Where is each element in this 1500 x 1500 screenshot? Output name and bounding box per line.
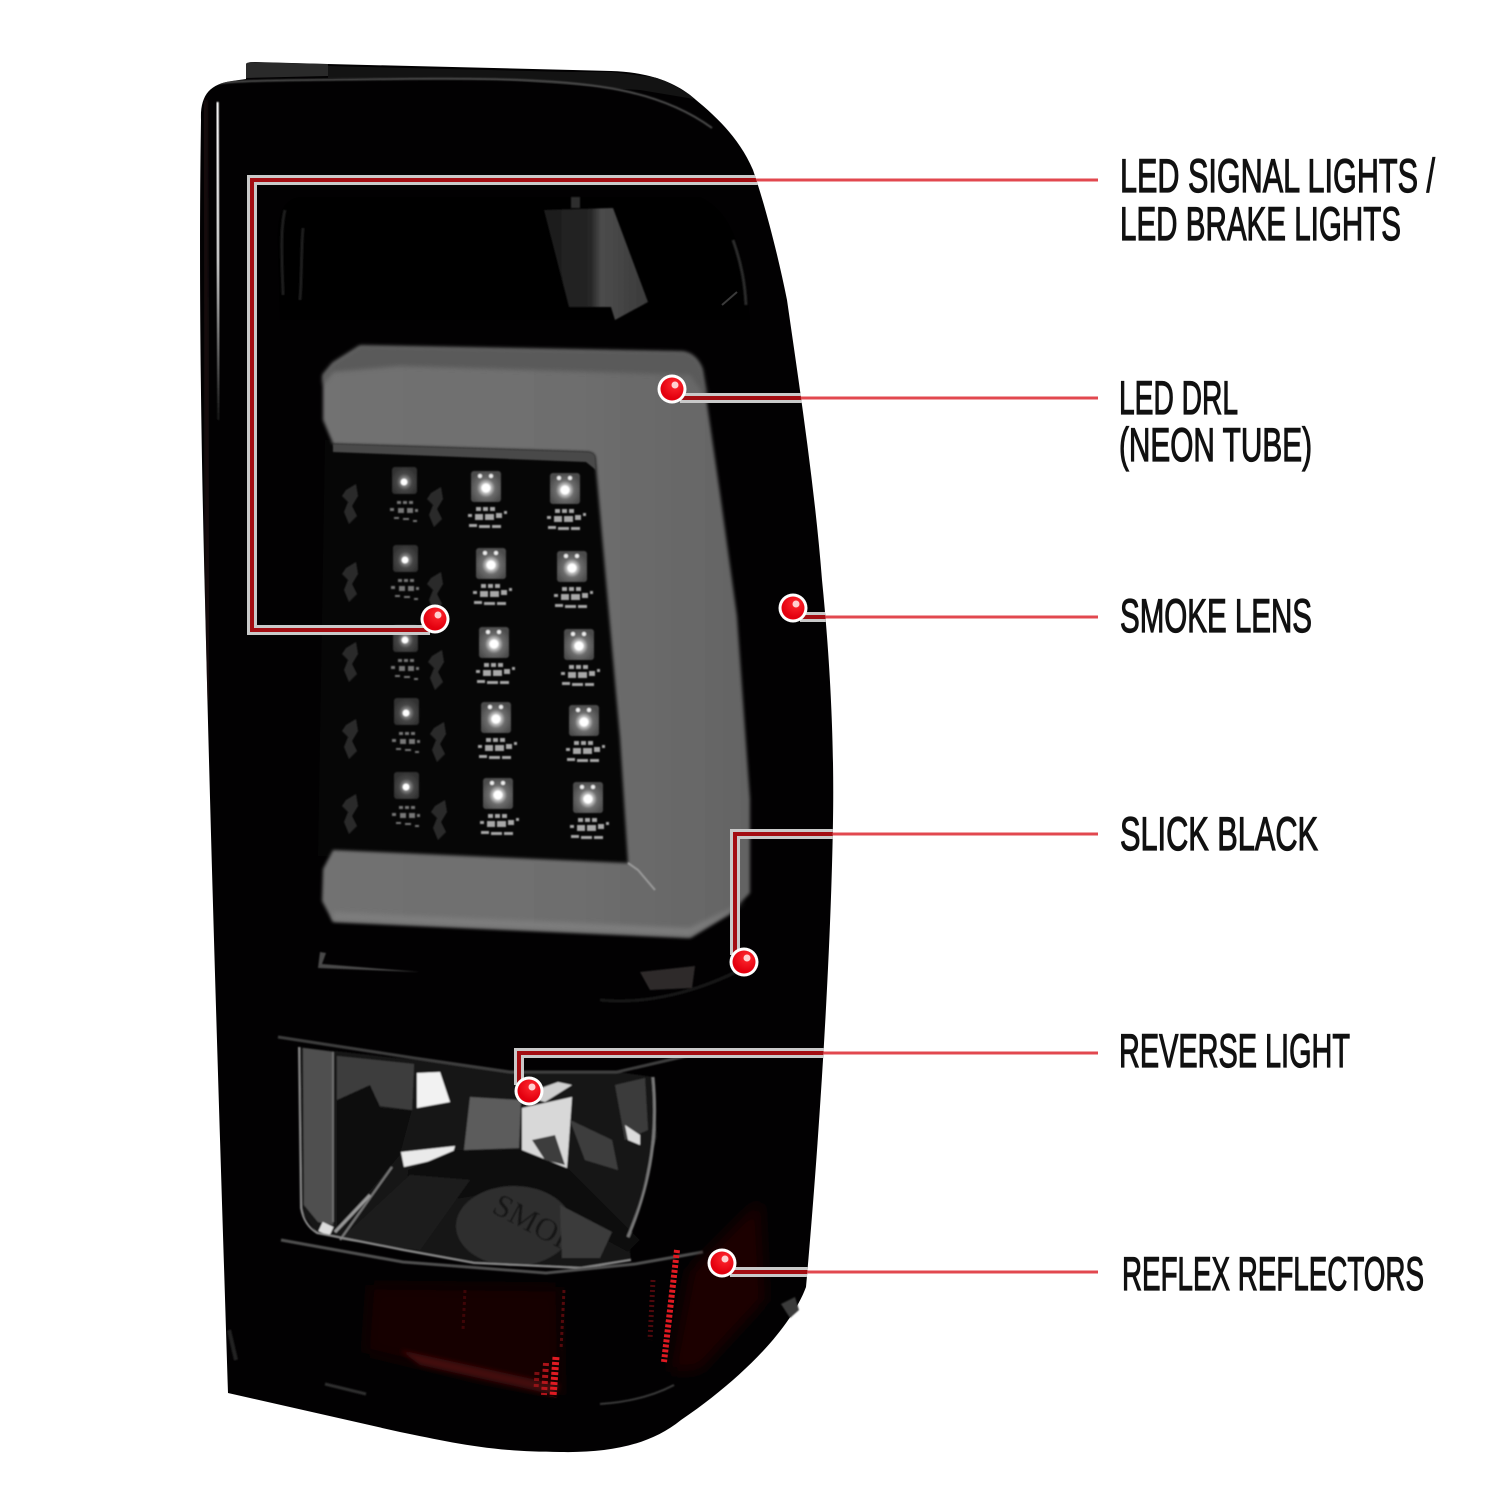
infographic <box>200 62 1436 1452</box>
label <box>1119 371 1312 471</box>
marker dot <box>420 604 450 634</box>
label: SLICK BLACK <box>1120 807 1318 860</box>
tail light body <box>200 62 833 1452</box>
marker dot <box>514 1076 544 1106</box>
leader line <box>252 180 1098 630</box>
label: LED DRL <box>1119 371 1238 424</box>
callout: smoke lens <box>778 594 1311 634</box>
leader line <box>730 1270 1098 1274</box>
callout: slick black <box>730 807 1318 976</box>
reverse light <box>278 1037 703 1273</box>
callout: reverse light <box>514 1033 1350 1106</box>
label: (NEON TUBE) <box>1119 418 1312 471</box>
reflex reflector <box>365 1200 765 1397</box>
label <box>1120 149 1436 250</box>
inner reflector block <box>544 197 648 320</box>
tail light photo <box>200 62 833 1452</box>
callout: LED DRL neon tube <box>658 371 1312 471</box>
marker dot <box>658 374 686 404</box>
marker dot <box>778 594 808 622</box>
leader line <box>519 1053 1098 1085</box>
body shading and reflections <box>205 62 712 700</box>
upper cavity <box>278 197 750 320</box>
callout: LED signal lights and brake lights <box>252 149 1436 634</box>
leader line <box>800 616 1098 618</box>
neon tube DRL <box>322 346 750 938</box>
lower bevel highlights <box>318 952 740 1001</box>
label: SMOKE LENS <box>1120 589 1312 642</box>
faint bulb lettering: SMOK <box>487 1186 586 1261</box>
LED array <box>342 467 609 840</box>
LED panel <box>318 440 636 866</box>
marker dot <box>708 1248 736 1278</box>
marker dot <box>730 948 758 976</box>
lower housing details <box>229 1297 799 1404</box>
label: REVERSE LIGHT <box>1119 1024 1350 1077</box>
leader line <box>680 396 1098 400</box>
leader line <box>735 834 1098 955</box>
callout: reflex reflectors <box>708 1248 1424 1292</box>
